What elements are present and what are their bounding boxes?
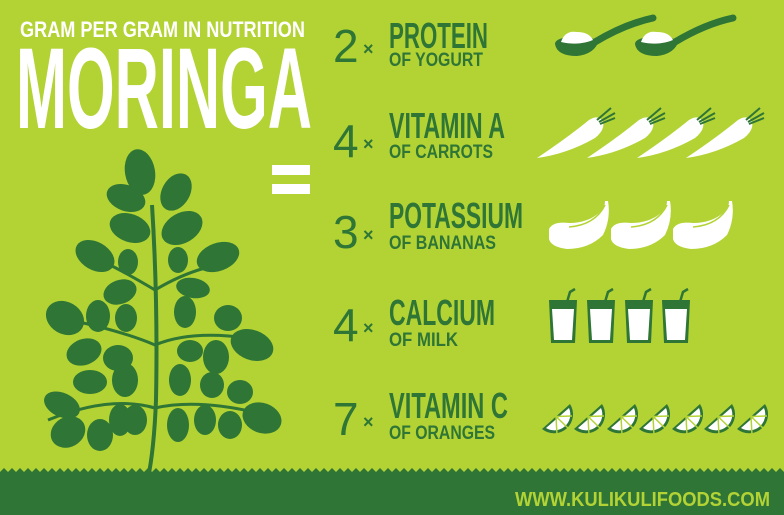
row: protein: 2 bbox=[333, 20, 359, 72]
row: calcium: CALCIUM bbox=[389, 292, 495, 333]
row: protein bbox=[333, 15, 488, 72]
row: calcium bbox=[333, 292, 495, 351]
row: protein: OF YOGURT bbox=[389, 50, 483, 71]
icons: milk cups bbox=[549, 289, 690, 343]
row: vitamin A: × bbox=[363, 134, 374, 154]
row: potassium bbox=[333, 195, 523, 258]
row: vitamin C: OF ORANGES bbox=[389, 423, 495, 444]
icons: bananas bbox=[549, 201, 733, 249]
row: vitamin A: 4 bbox=[333, 115, 359, 167]
row: vitamin A: OF CARROTS bbox=[389, 142, 493, 163]
row: protein: × bbox=[363, 39, 374, 59]
row: calcium: OF MILK bbox=[389, 330, 458, 351]
row: potassium: 3 bbox=[333, 206, 359, 258]
row: vitamin A bbox=[333, 105, 505, 167]
row: potassium: × bbox=[363, 225, 374, 245]
row: vitamin A: VITAMIN A bbox=[389, 105, 505, 146]
icons: spoons bbox=[555, 18, 733, 56]
row: protein: PROTEIN bbox=[389, 15, 488, 56]
ground bbox=[0, 468, 784, 515]
row: calcium: 4 bbox=[333, 299, 359, 351]
row: vitamin C: × bbox=[363, 412, 374, 432]
row: potassium: POTASSIUM bbox=[389, 195, 523, 236]
row: potassium: OF BANANAS bbox=[389, 233, 496, 254]
tree bbox=[40, 147, 286, 478]
subtitle: GRAM PER GRAM IN NUTRITION bbox=[20, 17, 305, 42]
row: vitamin C bbox=[333, 385, 508, 445]
icons: orange slices bbox=[542, 404, 768, 435]
icons: carrots bbox=[537, 108, 764, 158]
row: calcium: × bbox=[363, 318, 374, 338]
title: MORINGA bbox=[16, 25, 312, 153]
row: vitamin C: 7 bbox=[333, 393, 359, 445]
icon: equals sign bbox=[272, 165, 310, 194]
row: vitamin C: VITAMIN C bbox=[389, 385, 508, 426]
